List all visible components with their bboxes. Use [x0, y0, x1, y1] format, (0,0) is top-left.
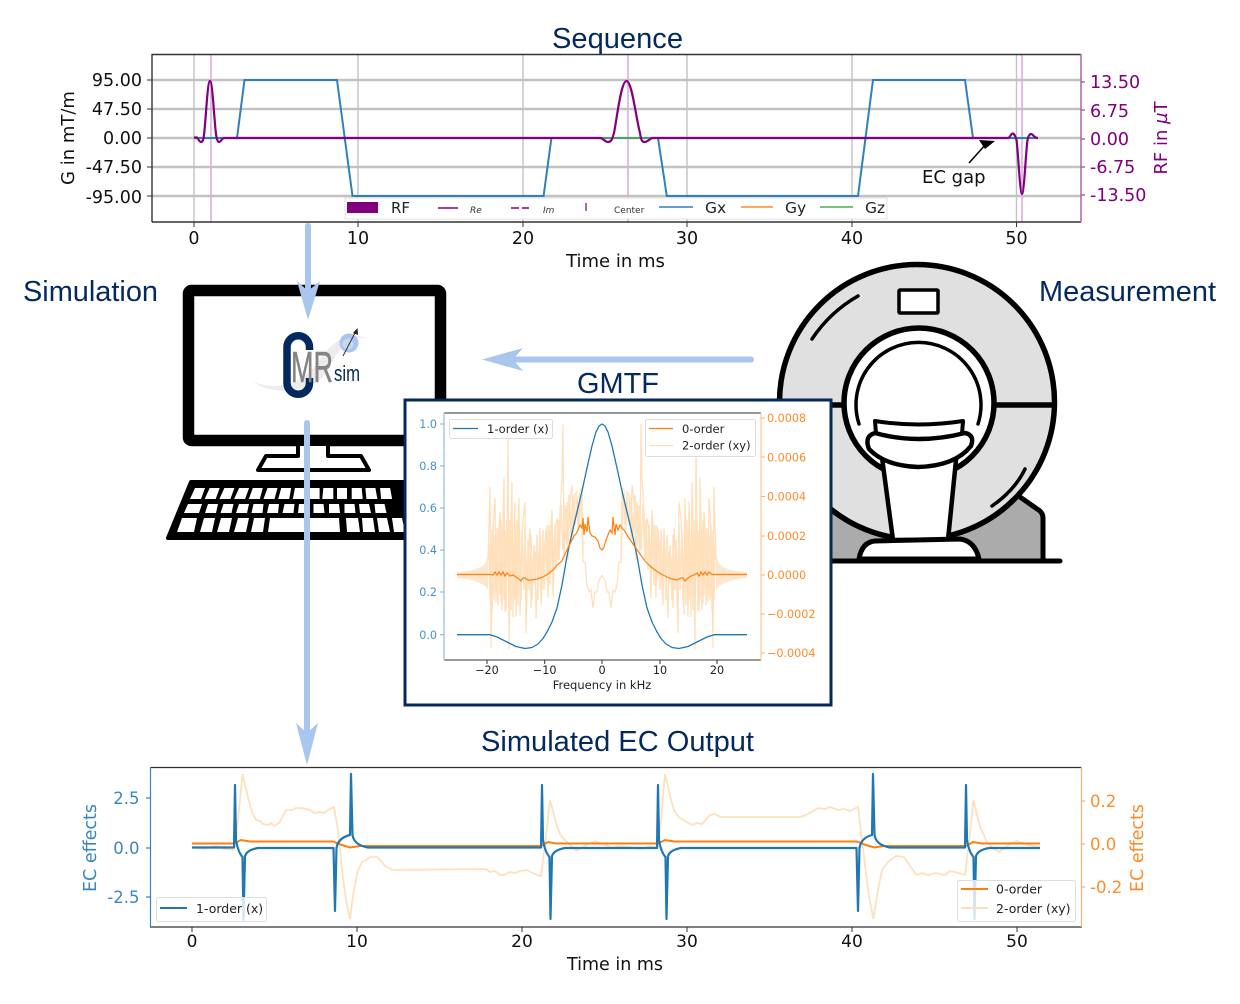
legend: 1-order: 1-order (x) — [196, 901, 263, 916]
right tick labels — [767, 412, 816, 660]
right axis — [1081, 767, 1085, 927]
RF center markers — [211, 54, 1022, 222]
left axis tick labels: 0.00 — [103, 129, 142, 149]
bore inner arc — [856, 342, 981, 424]
monitor — [188, 290, 440, 440]
bottom axis tick labels: 40 — [841, 229, 863, 249]
heading: Simulated EC Output: Simulated EC Output — [481, 726, 754, 758]
ground line — [825, 558, 1060, 564]
logo swoosh — [253, 336, 367, 391]
annotation: EC gap — [922, 140, 995, 188]
left axis — [146, 767, 150, 927]
right tick labels: 0.0 — [1090, 835, 1116, 854]
x tick labels: 10 — [653, 664, 667, 677]
left tick labels — [419, 418, 437, 642]
plot axes — [152, 54, 1081, 222]
head pillow — [867, 433, 972, 467]
left tick labels: 0.0 — [113, 839, 140, 858]
gradient waveform Gx — [194, 80, 1038, 196]
left tick labels: 0.8 — [419, 460, 437, 473]
arrow: simulation to EC output — [296, 423, 318, 765]
0-order curve — [457, 517, 747, 581]
legend: Gz — [865, 199, 885, 217]
right axis — [760, 413, 762, 660]
legend: Gy — [785, 199, 806, 217]
2-order spectrum left half — [457, 424, 602, 649]
axis label: RF: RF in µT — [1151, 100, 1172, 175]
right RF axis — [1081, 54, 1085, 222]
bottom axis tick labels: 30 — [676, 229, 698, 249]
heading: Sequence: Sequence — [552, 23, 683, 55]
legend: 0-order and 2-order — [646, 420, 756, 456]
0-order trace — [192, 840, 1040, 848]
left tick labels: 0.2 — [419, 586, 437, 599]
arrow: sequence to simulation — [297, 226, 320, 320]
panel: GMTF chart — [405, 400, 831, 705]
scanner base — [790, 497, 1043, 561]
heading: Measurement: Measurement — [1039, 276, 1216, 308]
chart: sequence diagram — [58, 54, 1172, 272]
logo spin sphere — [340, 328, 358, 356]
legend: Gx — [705, 199, 726, 217]
legend: 1-order — [450, 420, 552, 438]
legend: Re — [470, 206, 482, 216]
bottom axis tick labels — [188, 229, 1028, 249]
x axis label: Time in ms — [566, 955, 663, 975]
bottom axis tick labels: 0 — [188, 229, 200, 249]
arrow: measurement to simulation — [482, 348, 751, 371]
right tick labels: 0.0008 — [767, 412, 806, 425]
x tick labels — [187, 932, 1028, 952]
left tick labels: 1.0 — [419, 418, 437, 431]
top and bottom axes — [150, 768, 1082, 927]
x tick labels: 20 — [511, 932, 533, 952]
legend: RF — [391, 199, 410, 217]
bottom axis tick labels: 10 — [347, 229, 369, 249]
scanner ring — [780, 264, 1054, 540]
scanner bore — [844, 328, 994, 478]
right axis tick labels — [1090, 73, 1146, 206]
scanner seam — [777, 402, 1056, 408]
x tick labels: 40 — [841, 932, 863, 952]
keyboard keys — [177, 488, 405, 532]
logo letter C — [287, 336, 310, 394]
legend: Im — [543, 206, 555, 216]
heading: GMTF: GMTF — [577, 368, 659, 400]
scanner display — [899, 290, 938, 313]
axis label: gradient: G in mT/m — [58, 91, 79, 185]
legend: Center — [614, 206, 645, 216]
left tick labels: 2.5 — [113, 789, 140, 808]
gradient waveforms Gy Gz — [600, 137, 660, 139]
left axis tick labels — [86, 71, 142, 208]
right axis label: EC effects — [1128, 804, 1148, 892]
legend: 0-order and 2-order: 0-order — [996, 882, 1043, 896]
right tick labels: -0.2 — [1090, 878, 1122, 897]
legend: 0-order and 2-order: 0-order — [682, 422, 725, 436]
legend: 0-order and 2-order: 2-order (xy) — [996, 901, 1071, 916]
left axis tick labels: 95.00 — [92, 71, 142, 91]
right tick labels: 0.0004 — [767, 490, 806, 504]
right axis tick labels: 13.50 — [1090, 73, 1140, 93]
right axis tick labels: -13.50 — [1090, 186, 1146, 206]
right axis tick labels: 0.00 — [1090, 130, 1129, 150]
heading: Simulation: Simulation — [23, 276, 158, 308]
logo letters MR: MR — [291, 343, 333, 392]
legend: 1-order — [156, 898, 266, 922]
x tick labels — [475, 664, 724, 677]
2-order spectrum right half — [602, 424, 747, 649]
x tick labels: 0 — [187, 932, 197, 952]
left tick labels: -2.5 — [107, 888, 140, 907]
x tick labels: 10 — [346, 932, 368, 952]
left axis — [443, 413, 445, 660]
legend — [345, 198, 887, 219]
right tick labels — [1090, 792, 1122, 897]
right tick labels: −0.0004 — [767, 647, 816, 660]
right tick labels: 0.0002 — [767, 530, 806, 543]
left tick labels: 0.0 — [419, 629, 437, 642]
keyboard — [168, 482, 430, 538]
logo letters sim: sim — [334, 361, 360, 386]
legend: 0-order and 2-order — [958, 880, 1076, 922]
logo: CMRsim — [253, 328, 367, 394]
patient table — [859, 539, 979, 559]
legend: 1-order: 1-order (x) — [487, 422, 549, 436]
1-order curve — [457, 424, 747, 648]
RF waveform — [194, 81, 1038, 194]
axes — [444, 413, 761, 660]
bottom axis tick labels: 20 — [512, 229, 534, 249]
left axis tick labels: 47.50 — [92, 100, 142, 120]
bottom axis tick labels: 50 — [1005, 229, 1028, 249]
x tick labels: −10 — [533, 664, 557, 677]
patient body — [881, 450, 957, 540]
left axis tick labels: -47.50 — [86, 158, 142, 178]
x axis label: Frequency in kHz — [553, 678, 651, 692]
2-order trace — [192, 774, 1040, 919]
scanner highlights — [812, 296, 1025, 506]
left tick labels: 0.6 — [419, 502, 437, 515]
icon: MRI scanner — [777, 264, 1060, 561]
axis label: time: Time in ms — [565, 251, 665, 272]
left axis tick labels: -95.00 — [86, 188, 142, 208]
x tick labels: 50 — [1006, 932, 1028, 952]
right tick labels: 0.0006 — [767, 452, 806, 464]
left tick labels: 0.4 — [419, 544, 437, 557]
monitor stand — [258, 446, 369, 470]
annotation: EC gap: EC gap — [922, 167, 986, 188]
left axis label: EC effects — [81, 804, 101, 892]
right axis tick labels: 6.75 — [1090, 102, 1129, 122]
x tick labels: 0 — [598, 664, 606, 677]
x tick labels: −20 — [475, 664, 499, 677]
right tick labels: 0.2 — [1090, 792, 1116, 811]
head coil strip — [875, 421, 963, 439]
right axis tick labels: -6.75 — [1090, 158, 1135, 178]
chart: simulated EC output — [81, 767, 1148, 975]
legend: 0-order and 2-order: 2-order (xy) — [682, 438, 751, 452]
x tick labels: 20 — [710, 664, 724, 677]
right tick labels: 0.0000 — [767, 569, 806, 582]
right tick labels: −0.0002 — [767, 608, 816, 621]
icon: computer — [168, 290, 440, 538]
x tick labels: 30 — [676, 932, 698, 952]
left tick labels — [107, 789, 140, 907]
1-order trace — [192, 774, 1040, 920]
